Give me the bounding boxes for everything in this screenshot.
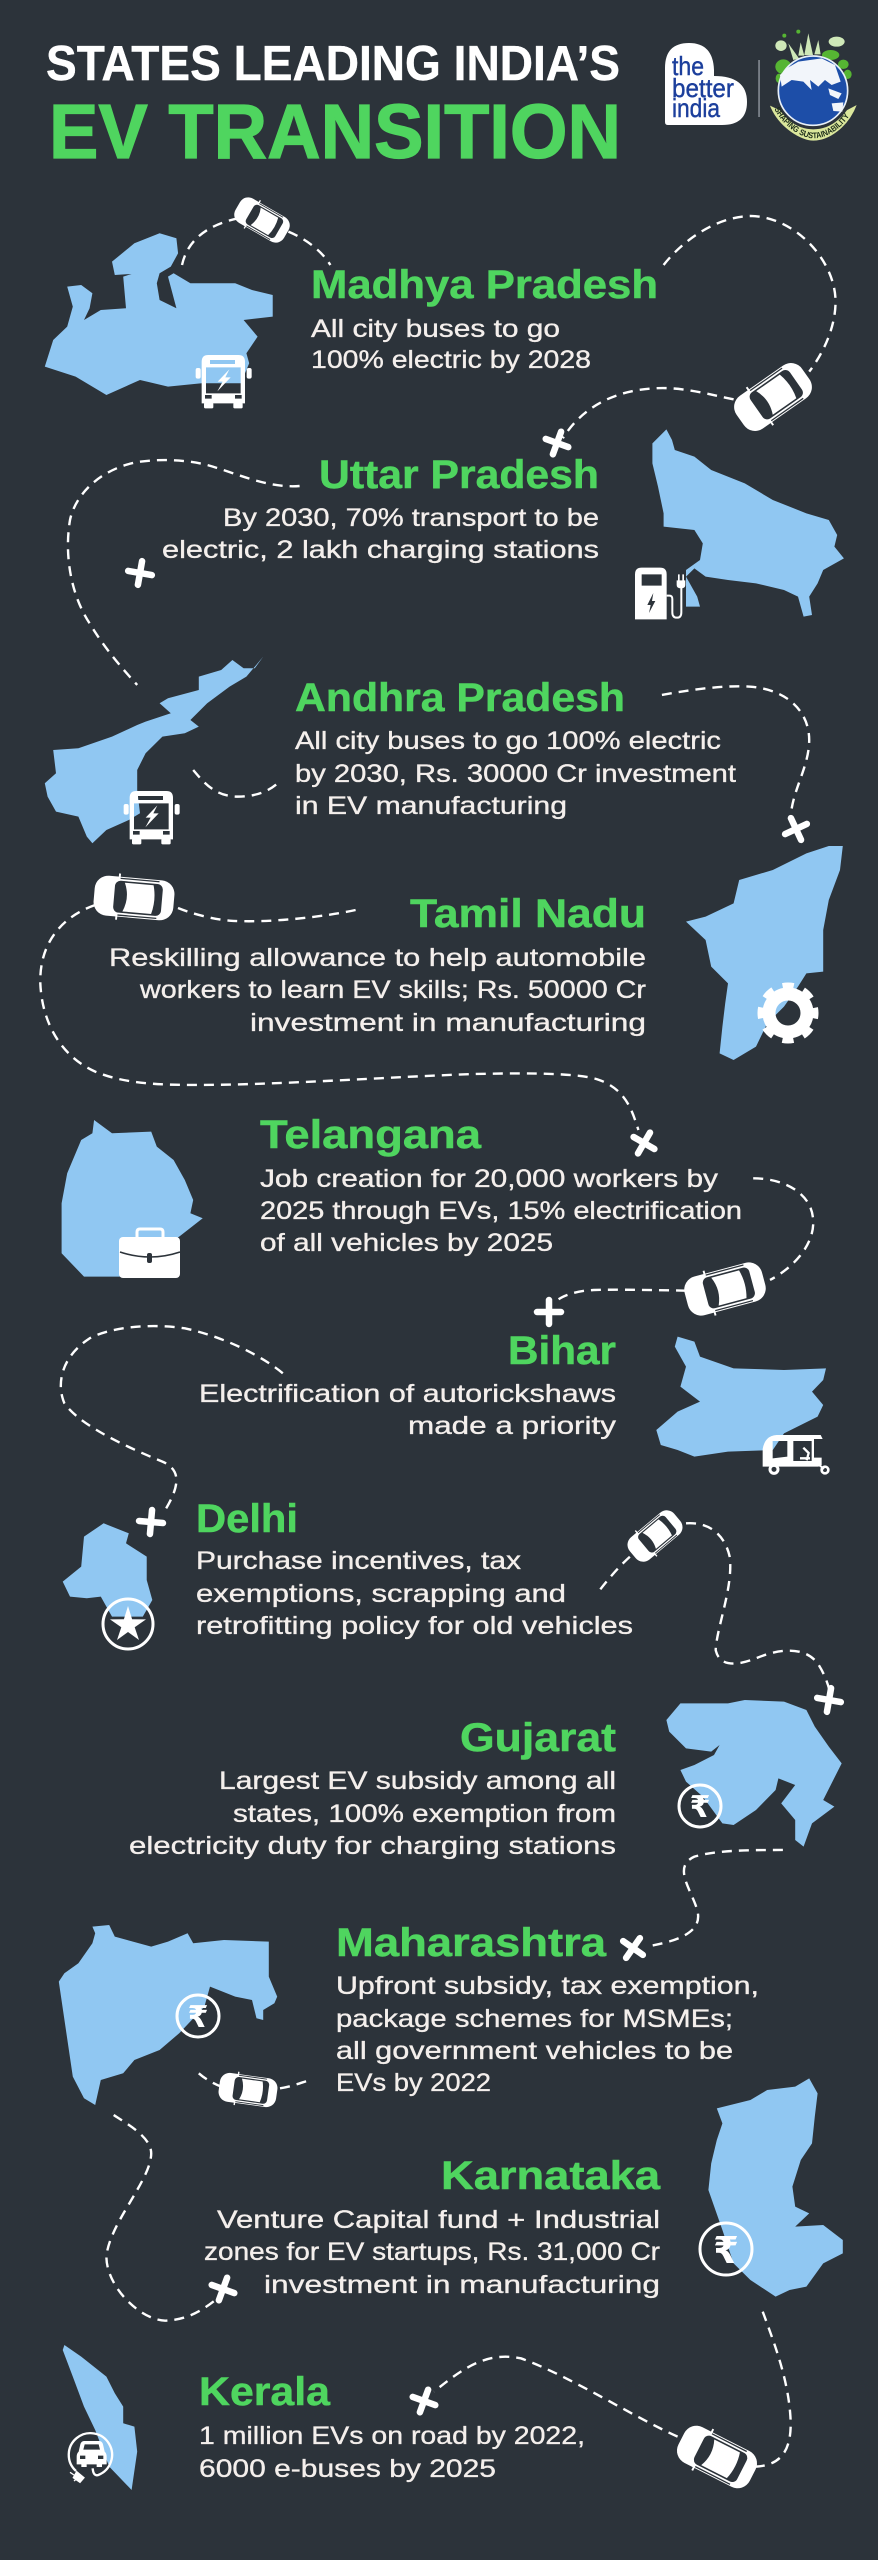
text block: made a priority bbox=[408, 1412, 617, 1440]
text block: Purchase incentives, tax bbox=[196, 1547, 522, 1575]
text block: investment in manufacturing bbox=[250, 1009, 646, 1037]
icon: car 3 bbox=[92, 871, 176, 925]
logo: the better india: the bbox=[672, 51, 704, 81]
icon: EV charging car bbox=[69, 2433, 112, 2482]
icon: gear bbox=[761, 986, 815, 1040]
map: Andhra Pradesh bbox=[45, 657, 263, 843]
heading: Andhra Pradesh bbox=[295, 676, 625, 720]
panel: Telangana bbox=[62, 1113, 742, 1278]
panel: Gujarat bbox=[129, 1700, 842, 1860]
panel: Bihar bbox=[199, 1329, 828, 1473]
heading: Madhya Pradesh bbox=[311, 263, 658, 307]
icon: electric autorickshaw bbox=[763, 1435, 828, 1473]
panel: Madhya Pradesh bbox=[45, 233, 658, 408]
text block: Reskilling allowance to help automobile bbox=[109, 944, 646, 972]
text block bbox=[336, 1972, 759, 2097]
icon: rupee badge: ₹ bbox=[690, 1790, 710, 1825]
title: EV TRANSITION bbox=[49, 89, 621, 175]
map: Delhi bbox=[63, 1523, 152, 1617]
icon: rupee badge: ₹ bbox=[188, 2000, 208, 2035]
map: Maharashtra bbox=[59, 1925, 277, 2105]
icon: car 5 bbox=[622, 1504, 688, 1568]
map: Bihar bbox=[656, 1337, 826, 1457]
text block: in EV manufacturing bbox=[295, 792, 567, 820]
text block: states, 100% exemption from bbox=[233, 1800, 616, 1828]
text block: EVs by 2022 bbox=[336, 2069, 491, 2097]
map: Gujarat bbox=[666, 1700, 842, 1847]
text block bbox=[204, 2206, 660, 2299]
icon: star badge bbox=[103, 1599, 153, 1649]
icon: car 7 bbox=[671, 2418, 763, 2496]
text block: 100% electric by 2028 bbox=[311, 346, 591, 374]
title bbox=[46, 37, 621, 175]
text block bbox=[295, 727, 736, 820]
text block: investment in manufacturing bbox=[264, 2271, 660, 2299]
text block: 2025 through EVs, 15% electrification bbox=[260, 1197, 742, 1225]
text block: by 2030, Rs. 30000 Cr investment bbox=[295, 760, 736, 788]
text block: electricity duty for charging stations bbox=[129, 1832, 616, 1860]
text block: exemptions, scrapping and bbox=[196, 1580, 566, 1608]
text block: electric, 2 lakh charging stations bbox=[162, 536, 599, 564]
panel: Karnataka bbox=[204, 2078, 843, 2299]
text block: zones for EV startups, Rs. 31,000 Cr bbox=[204, 2238, 660, 2266]
map: Kerala bbox=[63, 2345, 137, 2490]
text block bbox=[162, 504, 599, 564]
text block: Upfront subsidy, tax exemption, bbox=[336, 1972, 759, 2000]
map: Uttar Pradesh bbox=[652, 429, 844, 617]
icon: electric bus bbox=[196, 355, 252, 408]
icon: car 2 bbox=[727, 355, 819, 439]
icon: car 6 bbox=[217, 2069, 279, 2111]
text block: Electrification of autorickshaws bbox=[199, 1380, 616, 1408]
panel: Tamil Nadu bbox=[109, 846, 843, 1060]
heading: Tamil Nadu bbox=[410, 892, 646, 936]
panel: Kerala bbox=[63, 2345, 585, 2490]
map: Karnataka bbox=[708, 2078, 843, 2297]
panel: Uttar Pradesh bbox=[162, 429, 844, 619]
text block bbox=[109, 944, 646, 1037]
text block: Largest EV subsidy among all bbox=[219, 1767, 616, 1795]
icon: briefcase bbox=[119, 1229, 180, 1278]
title: STATES LEADING INDIA’S bbox=[46, 37, 620, 91]
logo: shaping sustainability: SHAPING SUSTAINABILITY bbox=[775, 107, 848, 138]
map: Madhya Pradesh bbox=[45, 233, 273, 395]
icon: car 4 bbox=[680, 1256, 770, 1322]
icon: rupee badge bbox=[177, 1995, 219, 2037]
icon: electric bus bbox=[124, 791, 180, 844]
text block: workers to learn EV skills; Rs. 50000 Cr bbox=[139, 976, 646, 1004]
text block bbox=[311, 315, 591, 374]
text block: Job creation for 20,000 workers by bbox=[260, 1165, 719, 1193]
heading: Gujarat bbox=[460, 1716, 616, 1760]
text block bbox=[129, 1767, 616, 1860]
icon: car 1 bbox=[230, 192, 294, 248]
text block bbox=[199, 2422, 585, 2483]
heading: Bihar bbox=[508, 1329, 616, 1373]
text block bbox=[196, 1547, 633, 1640]
logo: shaping sustainability bbox=[770, 30, 857, 141]
text block: Venture Capital fund + Industrial bbox=[217, 2206, 660, 2234]
heading: Kerala bbox=[199, 2370, 331, 2414]
map: Tamil Nadu bbox=[686, 846, 843, 1060]
text block: By 2030, 70% transport to be bbox=[223, 504, 599, 532]
heading: Uttar Pradesh bbox=[319, 453, 599, 497]
text block bbox=[260, 1165, 742, 1257]
icon: rupee badge: ₹ bbox=[713, 2229, 739, 2272]
text block: of all vehicles by 2025 bbox=[260, 1229, 553, 1257]
logo: the better india: india bbox=[672, 93, 720, 123]
text block: retrofitting policy for old vehicles bbox=[196, 1612, 633, 1640]
markers: route crosses bbox=[126, 428, 843, 2416]
heading: Maharashtra bbox=[336, 1921, 607, 1965]
text block: 6000 e-buses by 2025 bbox=[199, 2455, 496, 2483]
map: Telangana bbox=[62, 1120, 203, 1277]
heading: Karnataka bbox=[441, 2154, 661, 2198]
logo: the better india: better bbox=[672, 73, 734, 103]
route: dashed road connecting all states bbox=[40, 216, 836, 2467]
icon: charging station bbox=[635, 568, 685, 619]
text block: All city buses to go 100% electric bbox=[295, 727, 721, 755]
panel: Andhra Pradesh bbox=[45, 657, 736, 844]
icon: rupee badge bbox=[679, 1785, 721, 1827]
heading: Delhi bbox=[196, 1497, 298, 1541]
text block: package schemes for MSMEs; bbox=[336, 2005, 733, 2033]
heading: Telangana bbox=[260, 1113, 482, 1157]
panel: Delhi bbox=[63, 1497, 633, 1649]
panel: Maharashtra bbox=[59, 1921, 759, 2105]
text block bbox=[199, 1380, 617, 1440]
text block: All city buses to go bbox=[311, 315, 560, 343]
logo: the better india bbox=[665, 43, 747, 125]
icon: rupee badge bbox=[700, 2223, 752, 2275]
text block: all government vehicles to be bbox=[336, 2037, 733, 2065]
text block: 1 million EVs on road by 2022, bbox=[199, 2422, 585, 2450]
